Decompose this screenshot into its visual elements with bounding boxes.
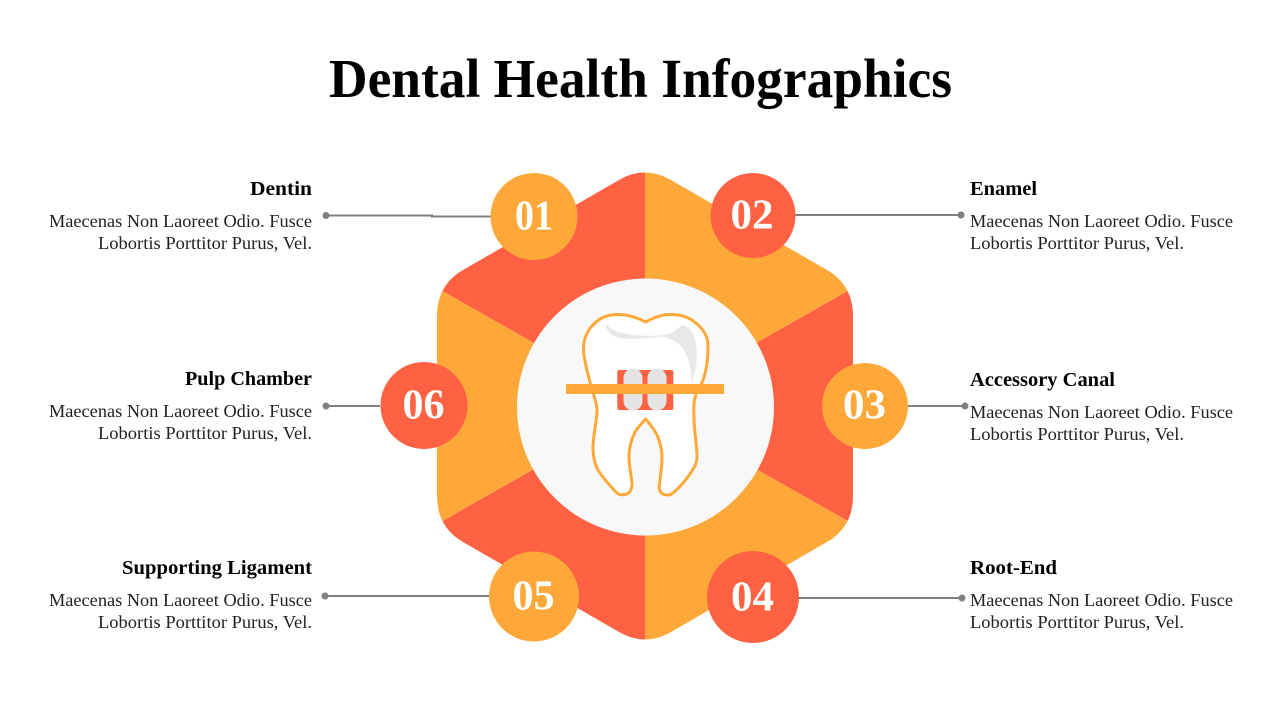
- text block: Root-End: Root-End: [970, 557, 1058, 579]
- badge 02: 02: [730, 192, 774, 238]
- text block: Supporting Ligament: Maecenas Non Laoreet Odio. Fusce: [49, 590, 312, 610]
- text block: Dentin: Lobortis Porttitor Purus, Vel.: [98, 233, 312, 253]
- text block: Accessory Canal: Lobortis Porttitor Purus, Vel.: [970, 424, 1184, 444]
- segment 1: top left: [442, 172, 645, 343]
- connector 05: [322, 592, 490, 600]
- connector 06: [322, 402, 380, 410]
- text block: Pulp Chamber: [49, 368, 312, 443]
- segment 5: bottom left: [442, 470, 645, 640]
- title: Dental Health Infographics: [329, 48, 952, 109]
- bracket: [617, 370, 673, 410]
- badge 04: [707, 551, 799, 643]
- segment 4: bottom right: [645, 470, 848, 640]
- badge 05: 05: [512, 574, 554, 620]
- text block: Accessory Canal: Maecenas Non Laoreet Odio. Fusce: [970, 402, 1233, 422]
- tooth highlight: [606, 323, 697, 383]
- connector 01: [322, 212, 491, 219]
- segment 6: left: [437, 291, 534, 521]
- text block: Accessory Canal: [970, 369, 1233, 444]
- text block: Enamel: Maecenas Non Laoreet Odio. Fusce: [970, 211, 1233, 231]
- wire: [566, 384, 724, 394]
- connector 03: [908, 402, 968, 410]
- text block: Root-End: Lobortis Porttitor Purus, Vel.: [970, 612, 1184, 632]
- text block: Enamel: Enamel: [970, 178, 1037, 200]
- text block: Enamel: Lobortis Porttitor Purus, Vel.: [970, 233, 1184, 253]
- text block: Dentin: Maecenas Non Laoreet Odio. Fusce: [49, 211, 312, 231]
- badge 02: [710, 173, 796, 258]
- badge 06: 06: [402, 382, 444, 428]
- badge 06: [380, 362, 468, 449]
- text block: Pulp Chamber: Maecenas Non Laoreet Odio. Fusce: [49, 401, 312, 421]
- hexagon diagram: [437, 172, 853, 640]
- segment 3: right: [756, 291, 853, 521]
- text block: Supporting Ligament: Lobortis Porttitor Purus, Vel.: [98, 612, 312, 632]
- badge 01: 01: [515, 194, 553, 240]
- center circle: [517, 278, 774, 536]
- text block: Pulp Chamber: Pulp Chamber: [185, 368, 312, 390]
- text block: Accessory Canal: Accessory Canal: [970, 369, 1115, 391]
- text block: Root-End: Maecenas Non Laoreet Odio. Fusce: [970, 590, 1233, 610]
- text block: Enamel: [970, 178, 1233, 253]
- text block: Pulp Chamber: Lobortis Porttitor Purus, Vel.: [98, 423, 312, 443]
- badge 03: 03: [843, 382, 886, 428]
- badge 03: [822, 363, 908, 449]
- text block: Supporting Ligament: Supporting Ligament: [122, 557, 312, 579]
- text block: Dentin: [49, 178, 313, 253]
- text block: Dentin: Dentin: [250, 178, 313, 200]
- badge 01: [490, 173, 578, 260]
- text block: Supporting Ligament: [49, 557, 312, 632]
- badge 04: 04: [731, 574, 774, 620]
- icon: tooth with braces: [566, 314, 724, 495]
- segment 2: top right: [645, 172, 848, 342]
- text block: Root-End: [970, 557, 1233, 632]
- badge 05: [489, 552, 579, 642]
- connector 04: [799, 594, 966, 602]
- connector 02: [795, 212, 964, 218]
